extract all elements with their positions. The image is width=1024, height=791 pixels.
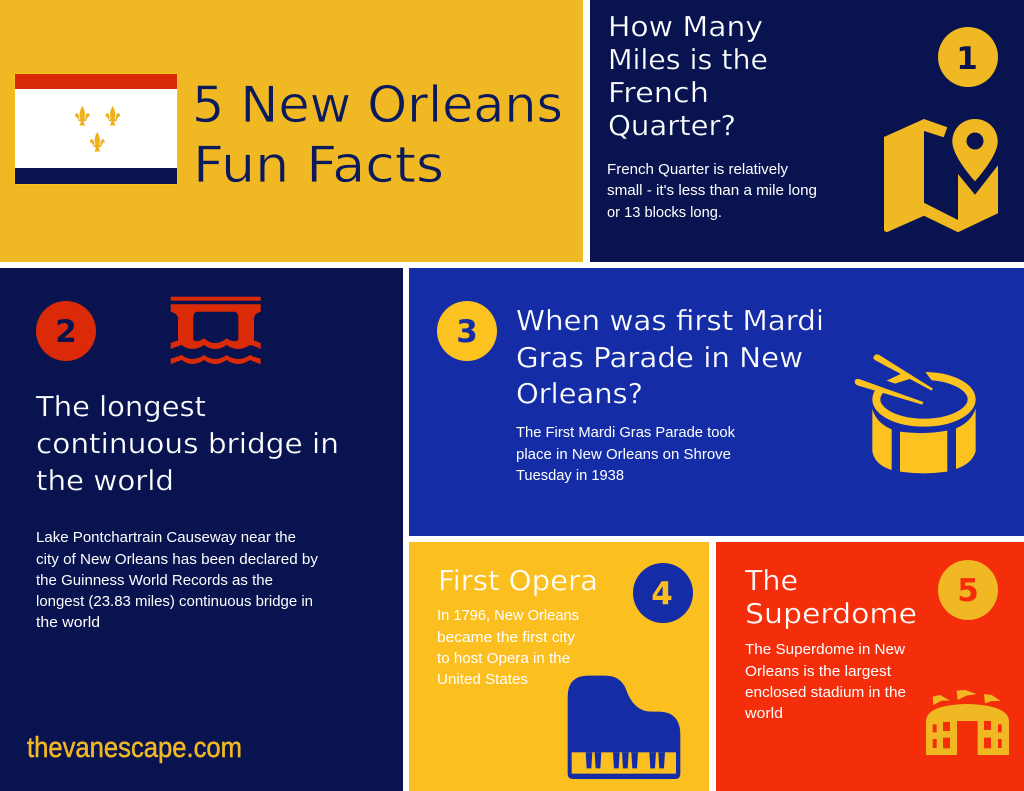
heading: fact 3 — [516, 304, 824, 410]
panel: fact 3 Mardi Gras — [409, 268, 1024, 536]
badge: number 1 — [938, 27, 998, 87]
text: fact 4 body: became the first city — [437, 629, 576, 646]
title text — [192, 76, 563, 194]
badge: number 2: 2 — [55, 314, 77, 350]
text: fact 5 body: enclosed stadium in the — [745, 684, 906, 701]
heading: fact 2: the world — [36, 464, 174, 497]
badge: number 5: 5 — [957, 573, 979, 609]
text: fact 2 body: the Guinness World Records as the — [36, 572, 273, 589]
text: fact 2 body: Lake Pontchartrain Causeway near the — [36, 529, 296, 546]
heading: fact 1: How Many — [608, 10, 763, 43]
text: fact 4 body: United States — [437, 671, 528, 688]
icon: stadium with flags — [926, 690, 1009, 755]
icon: New Orleans flag — [14, 73, 178, 185]
text: fact 2 body: the world — [36, 614, 100, 631]
badge: number 5 — [938, 560, 998, 620]
text: fact 5 body — [744, 641, 906, 722]
text: fact 4 body: In 1796, New Orleans — [437, 607, 579, 624]
heading: fact 1: French — [608, 76, 709, 109]
website link text: thevanescape.com — [27, 732, 242, 764]
text: fact 1 body: French Quarter is relatively — [607, 161, 788, 178]
title text: Fun Facts — [193, 136, 444, 194]
icon: grand piano — [568, 676, 680, 779]
heading: fact 5: Superdome — [745, 597, 917, 630]
text: fact 3 body: place in New Orleans on Shrove — [516, 446, 731, 463]
text: fact 2 body — [36, 529, 318, 631]
heading: fact 3: When was first Mardi — [516, 304, 824, 337]
panel: fact 2 bridge — [0, 268, 403, 791]
text: fact 1 body: small - it's less than a mile long — [607, 182, 817, 199]
heading: fact 2: continuous bridge in — [36, 427, 339, 460]
text: fact 1 body — [607, 161, 817, 221]
heading: fact 5: The — [744, 564, 798, 597]
panel: fact 1 French Quarter — [590, 0, 1024, 262]
text: fact 3 body: The First Mardi Gras Parade took — [516, 424, 735, 441]
heading: fact 2 — [35, 390, 339, 497]
badge: number 2 — [36, 301, 96, 361]
badge: number 4 — [633, 563, 693, 623]
panel: title — [0, 0, 583, 262]
heading: fact 4: First Opera — [438, 564, 598, 597]
heading: fact 5 — [744, 564, 917, 630]
title text: 5 New Orleans — [192, 76, 563, 134]
text: fact 4 body: to host Opera in the — [437, 650, 570, 667]
badge: number 1: 1 — [956, 41, 978, 77]
badge: number 3 — [437, 301, 497, 361]
badge: number 3: 3 — [456, 314, 478, 350]
text: fact 1 body: or 13 blocks long. — [607, 204, 722, 221]
panel: fact 5 Superdome — [716, 542, 1024, 791]
text: fact 3 body — [516, 424, 735, 484]
heading: fact 1: Quarter? — [608, 109, 736, 142]
text: fact 5 body: world — [744, 705, 783, 722]
text: fact 2 body: city of New Orleans has been declared by — [36, 551, 318, 568]
heading: fact 3: Gras Parade in New — [516, 341, 803, 374]
heading: fact 1: Miles is the — [608, 43, 768, 76]
heading: fact 1 — [608, 10, 768, 142]
badge: number 4: 4 — [651, 576, 673, 612]
icon: map with pin — [884, 119, 998, 232]
panel: fact 4 opera — [409, 542, 709, 791]
text: fact 4 body — [437, 607, 579, 688]
icon: drum — [855, 354, 976, 473]
heading: fact 2: The longest — [35, 390, 206, 423]
text: fact 3 body: Tuesday in 1938 — [516, 467, 624, 484]
heading: fact 3: Orleans? — [516, 377, 643, 410]
text: fact 5 body: The Superdome in New — [745, 641, 905, 658]
icon: bridge over water — [171, 297, 261, 364]
text: fact 2 body: longest (23.83 miles) continuous bridge in — [36, 593, 313, 610]
text: fact 5 body: Orleans is the largest — [745, 663, 892, 680]
